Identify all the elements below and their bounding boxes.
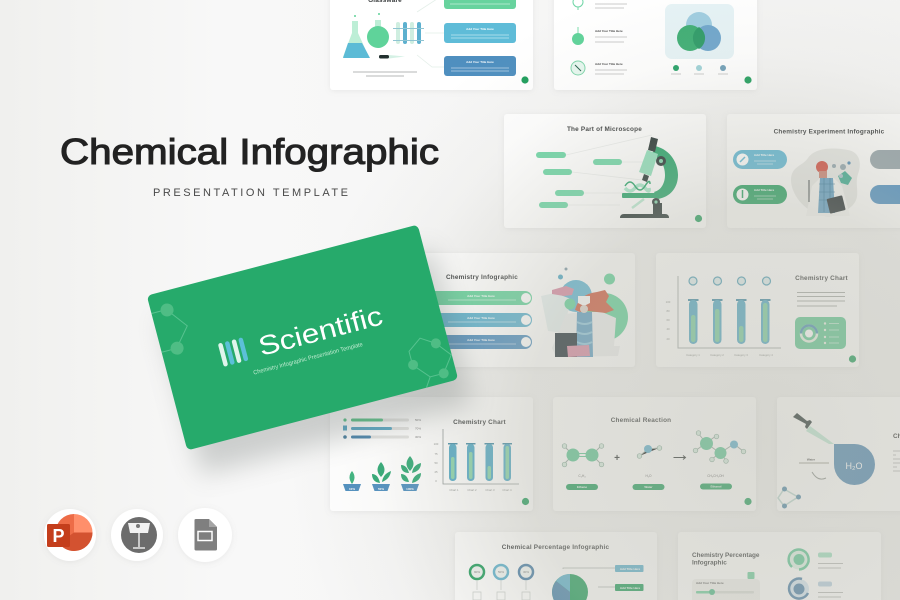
- y axis labels: 75: [434, 452, 438, 456]
- label: green: Add Title Here: [620, 586, 640, 590]
- label: blue: [615, 565, 644, 572]
- label box blue: Add Your Title Here: [466, 27, 494, 31]
- category labels: Category 4: [759, 353, 773, 357]
- icon: conical flask: [343, 15, 370, 58]
- tube 1: [688, 277, 698, 344]
- slide title: Chemistry Infographic: [446, 274, 518, 281]
- slide: the part of microscope: [504, 114, 706, 228]
- pill text: Ethanol: [710, 484, 722, 488]
- slide: glassware: [330, 0, 533, 90]
- description text: [797, 292, 845, 306]
- ring 90%: 90%: [474, 570, 480, 574]
- ring blue: [789, 579, 809, 599]
- y axis labels: 100: [434, 442, 439, 446]
- bar: blue: [425, 313, 532, 327]
- plant 10%: [343, 471, 361, 491]
- donut card: [795, 317, 846, 349]
- slide: chemistry percentage: [678, 532, 881, 600]
- icon: dropper: [793, 413, 834, 444]
- category labels: Chart 3: [485, 488, 495, 492]
- molecule: H2O: [637, 445, 662, 458]
- y axis labels: [434, 442, 439, 483]
- pill: green: Add Title Here: [754, 188, 774, 192]
- progress bars: 50%: [415, 418, 421, 422]
- description lines: [893, 451, 900, 471]
- part labels: [536, 152, 622, 208]
- slide: chemistry chart plants: [330, 397, 533, 511]
- pill: gray: [870, 150, 900, 169]
- category labels: Chart 2: [467, 488, 477, 492]
- slide: venn diagram: [554, 0, 757, 90]
- label: blue: Add Title Here: [620, 567, 640, 571]
- badge: [744, 498, 752, 505]
- plus sign: +: [614, 453, 620, 464]
- bar: blue: Add Your Title Here: [467, 316, 495, 320]
- molecule: [778, 486, 801, 508]
- connector lines: [563, 568, 615, 587]
- app icons: [44, 508, 232, 562]
- card shadow: [161, 249, 472, 475]
- icon: water drop: H₂O: [846, 461, 862, 471]
- ring 30%: 30%: [523, 570, 529, 574]
- pill: green: [733, 185, 787, 204]
- category labels: [686, 353, 773, 357]
- stems and tubes: [473, 580, 530, 600]
- cover card: Scientific: [146, 225, 459, 453]
- bar: dark blue: [425, 335, 532, 349]
- icon: test tubes: [218, 337, 249, 367]
- slide: chemical reaction: [553, 397, 756, 511]
- icon: flask: [572, 27, 584, 45]
- badge: [695, 215, 702, 222]
- text column: [595, 4, 627, 74]
- illustration: scientist with flask: [541, 268, 628, 357]
- category labels: Category 1: [686, 353, 700, 357]
- progress bars: 70%: [415, 426, 421, 430]
- chart axes: [443, 429, 519, 484]
- cover heading: Scientific: [255, 301, 386, 362]
- plant 50%: [372, 462, 391, 491]
- progress bars: [343, 418, 421, 439]
- legend: [671, 65, 728, 74]
- icon: test tube rack: [393, 22, 424, 44]
- pill text: [577, 484, 722, 489]
- cover tagline: Chemistry Infographic Presentation Template: [253, 342, 364, 377]
- pill: blue: [733, 150, 787, 169]
- slide title: The Part of Microscope: [567, 126, 642, 133]
- icon: round flask: [367, 13, 389, 48]
- formula labels: C₂H₄: [578, 474, 586, 478]
- slider card: Add Your Title Here: [696, 581, 724, 585]
- formula labels: H₂O: [645, 474, 652, 478]
- category labels: Chart 1: [449, 488, 459, 492]
- pill text: Water: [644, 485, 653, 489]
- y axis labels: 50: [434, 461, 438, 465]
- pill: dark blue: [870, 185, 900, 204]
- molecule: C2H4: [562, 444, 604, 467]
- label box dark blue: [444, 56, 516, 76]
- connector lines: [417, 0, 444, 67]
- slide: chemistry experiment: [727, 114, 900, 228]
- text column: Add Your Title Here: [595, 29, 623, 33]
- chart axes: [678, 276, 781, 348]
- y axis labels: [666, 300, 671, 341]
- icon: Keynote: [111, 509, 163, 561]
- label: green: [615, 584, 644, 591]
- curved arrow: [812, 472, 826, 479]
- icon: top leaf: [573, 0, 583, 10]
- icon: PowerPoint: P: [52, 526, 65, 546]
- pill text: Ethene: [577, 485, 587, 489]
- icon: Google Slides: [178, 508, 232, 562]
- bar: dark blue: Add Your Title Here: [467, 338, 495, 342]
- badge: [744, 76, 752, 84]
- plant 100%: [401, 456, 421, 491]
- y axis labels: 80: [666, 309, 670, 313]
- chart title: Chemistry Chart: [453, 419, 507, 426]
- ring 90%: [470, 565, 484, 579]
- y axis labels: 25: [434, 470, 438, 474]
- molecule: ethanol: [693, 431, 746, 463]
- y axis labels: 0: [435, 479, 437, 483]
- y axis labels: 20: [666, 337, 670, 341]
- name pills: [566, 484, 732, 490]
- label box blue: [444, 23, 516, 43]
- category labels: Chart 4: [502, 488, 512, 492]
- water label: Water: [807, 458, 816, 462]
- tube 3: [736, 277, 746, 344]
- plant 100%: 100%: [406, 487, 414, 491]
- badge: [849, 355, 856, 363]
- subtitle: PRESENTATION TEMPLATE: [153, 187, 348, 199]
- ring 50%: [494, 565, 508, 579]
- connector lines: [566, 135, 652, 205]
- slide title: Chemical Percentage Infographic: [502, 544, 609, 551]
- text column: Add Your Title Here: [595, 62, 623, 66]
- tube 4: [760, 277, 770, 344]
- slide title: Chemical Reaction: [611, 417, 671, 424]
- slide: water dropper: [777, 397, 900, 511]
- pie chart: [552, 574, 588, 600]
- icon: dropper: [379, 55, 405, 58]
- slider card: [692, 572, 760, 600]
- tube 2: [712, 277, 722, 344]
- icon: petri dish: [571, 61, 585, 75]
- illustration: scientist: [791, 148, 860, 216]
- caption lines: [353, 72, 417, 76]
- plant 10%: 10%: [349, 487, 355, 491]
- text blocks: [818, 552, 843, 597]
- bar: green: [425, 291, 532, 305]
- icon: microscope: [620, 137, 678, 218]
- title: Chemical Infographic: [60, 131, 439, 172]
- tube chart: [448, 443, 512, 481]
- category labels: [449, 488, 512, 492]
- category labels: Category 2: [710, 353, 724, 357]
- ring 50%: 50%: [498, 570, 504, 574]
- label box green: [444, 0, 516, 9]
- icon: PowerPoint: [44, 509, 96, 561]
- pill: blue: Add Title Here: [754, 153, 774, 157]
- formula labels: [578, 474, 724, 478]
- slide title: Infographic: [692, 560, 727, 566]
- ring green: [789, 550, 809, 570]
- slide title: Chemistry Percentage: [692, 552, 760, 559]
- chart title: Chemistry Chart: [795, 275, 849, 282]
- formula labels: CH₃CH₂OH: [707, 474, 724, 478]
- plant 50%: 50%: [378, 487, 384, 491]
- y axis labels: 60: [666, 318, 670, 322]
- arrow: [674, 456, 686, 460]
- molecule: left: [151, 304, 188, 355]
- y axis labels: 40: [666, 327, 670, 331]
- y axis labels: 100: [666, 300, 671, 304]
- badge: [522, 498, 529, 505]
- slide: chemistry infographic: [420, 253, 635, 367]
- badge: [521, 76, 529, 84]
- slide title: Chemistry Experiment Infographic: [774, 128, 885, 136]
- slide: chemical percentage: [455, 532, 657, 600]
- progress bars: 30%: [415, 435, 421, 439]
- ring 30%: [519, 565, 533, 579]
- venn diagram: [665, 4, 734, 59]
- bar: green: Add Your Title Here: [467, 294, 495, 298]
- label box dark blue: Add Your Title Here: [466, 60, 494, 64]
- slide: chemistry chart tubes: [656, 253, 859, 367]
- molecule: right: [408, 338, 452, 388]
- category labels: Category 3: [734, 353, 748, 357]
